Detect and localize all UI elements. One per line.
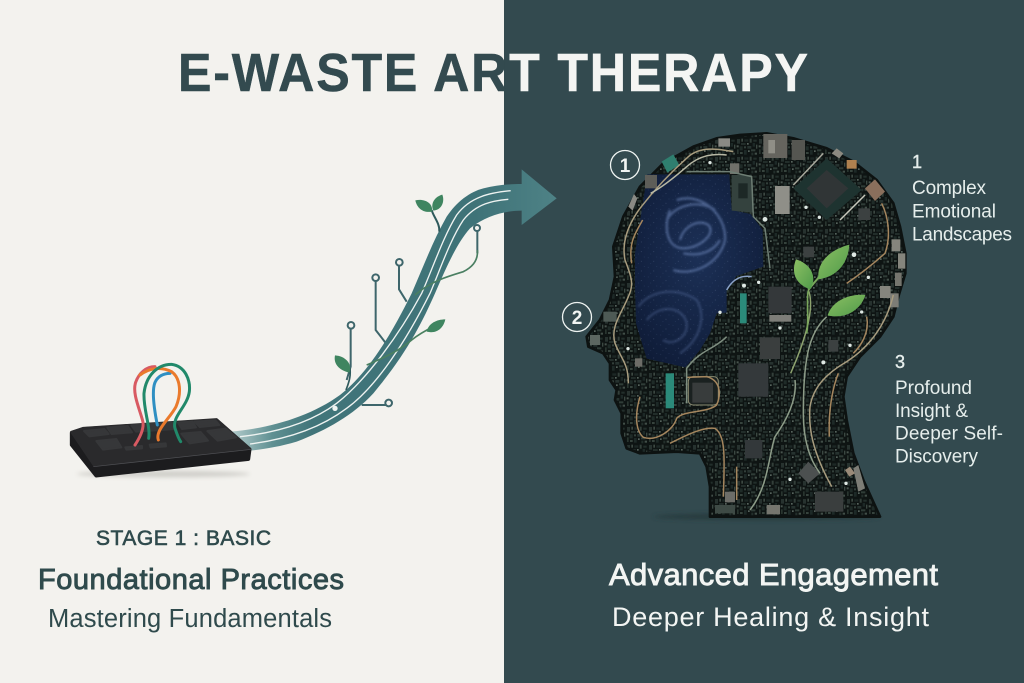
label 3: profound insight: Deeper Self- (895, 424, 1003, 444)
galaxy swirl upper (667, 198, 725, 272)
label 3: profound insight (895, 352, 1003, 468)
label 1: complex emotional landscapes: Complex (912, 178, 986, 199)
label 3: profound insight: Profound (895, 378, 972, 399)
stage label: STAGE 1 : BASIC (96, 527, 271, 550)
marker 1: 1 (620, 156, 631, 177)
label 1: complex emotional landscapes (912, 152, 1012, 246)
head shadow (653, 513, 880, 520)
circuit chips (590, 134, 905, 514)
panel: right dark background (504, 0, 1024, 683)
label 1: complex emotional landscapes: Landscapes (912, 224, 1012, 246)
arrow band (230, 169, 557, 451)
icon: keypad with looping wires (71, 364, 252, 477)
label 3: profound insight: Discovery (895, 446, 978, 468)
label 1: complex emotional landscapes: Emotional (912, 202, 996, 222)
galaxy swirl lower (638, 292, 701, 353)
marker 2: 2 (572, 308, 582, 329)
label 3: profound insight: Insight & (895, 401, 968, 422)
label 3: profound insight: 3 (895, 352, 905, 372)
vine with leaves (335, 195, 477, 390)
circuit board head illustration (587, 133, 905, 520)
keypad shadow (77, 471, 250, 477)
circuit traces (614, 149, 893, 510)
text block: stage 1 caption (38, 527, 344, 633)
circuit branches with nodes (347, 229, 477, 405)
keypad base (71, 420, 250, 476)
cosmos window (635, 174, 763, 367)
marker 1 (610, 150, 640, 180)
marker 2 (562, 302, 592, 332)
title: E-WASTE ART THERAPY (178, 43, 808, 103)
label 1: complex emotional landscapes: 1 (912, 152, 922, 172)
arrow: circuit pathway from keypad to head (230, 169, 557, 451)
advanced heading: Advanced Engagement (609, 557, 938, 592)
panel: left light background (0, 0, 504, 683)
colored wires (135, 364, 190, 445)
advanced subheading: Deeper Healing & Insight (612, 602, 929, 632)
keypad keys (84, 420, 236, 450)
seedling with green leaves (794, 245, 865, 333)
glowing solder points (626, 161, 870, 485)
stage subheading: Mastering Fundamentals (48, 605, 332, 633)
text block: advanced stage caption (609, 557, 938, 632)
stage heading: Foundational Practices (38, 564, 344, 596)
head silhouette (587, 133, 905, 517)
arrow highlight lines (240, 191, 511, 444)
circuit nodes (348, 225, 480, 406)
